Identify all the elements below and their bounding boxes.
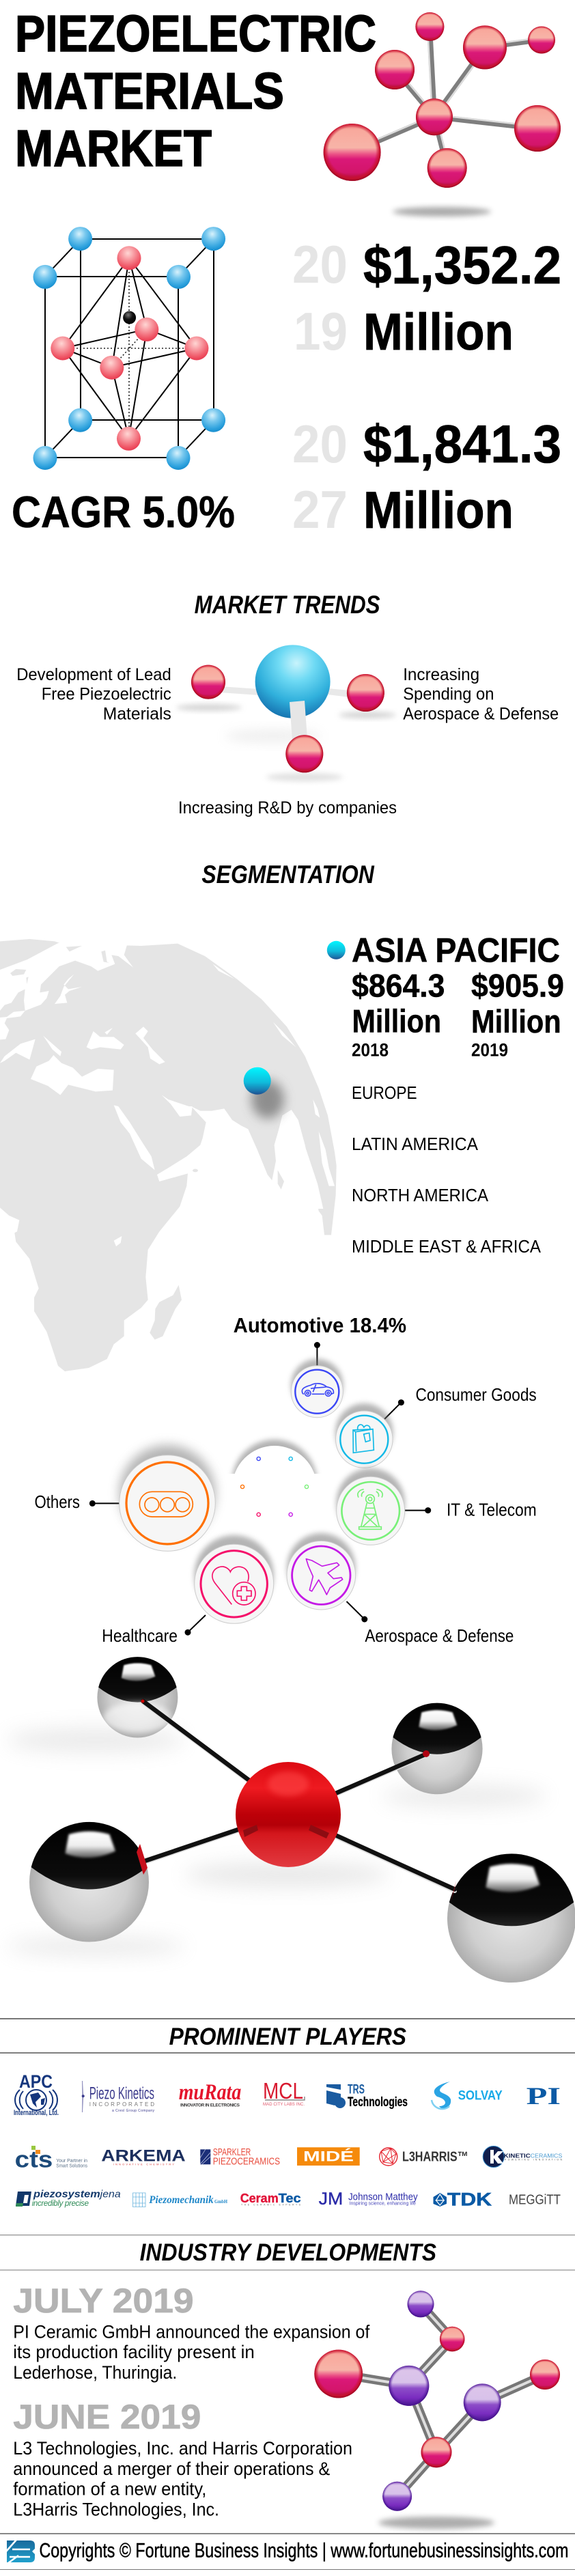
logo: TRS Technologies	[326, 2083, 408, 2110]
logo: Piezo Kinetics: Piezo Kinetics	[89, 2084, 154, 2103]
market value 2019: 19	[294, 301, 348, 361]
logo: CTS	[15, 2146, 87, 2172]
icon: IT and telecom	[337, 1468, 405, 1545]
development: june 2019: L3Harris Technologies, Inc.	[13, 2500, 219, 2520]
legend: asia pacific: $864.3	[352, 968, 445, 1004]
region list: LATIN AMERICA	[352, 1134, 479, 1154]
logo: Piezomechanik	[132, 2193, 228, 2207]
logo: PI: PI	[527, 2082, 561, 2110]
molecule illustration: chrome and red	[7, 1657, 575, 1983]
logo: Sparkler Piezoceramics: SPARKLER	[213, 2147, 251, 2158]
trend: aerospace and defense spending: Increasing	[403, 665, 479, 684]
trend: R and D: Increasing R&D by companies	[178, 798, 397, 817]
logo: Piezomechanik: GmbH	[214, 2199, 228, 2204]
logo: Johnson Matthey: Johnson Matthey	[348, 2192, 418, 2202]
region list: NORTH AMERICA	[352, 1185, 489, 1205]
development: july 2019: PI Ceramic GmbH announced the expansion of	[13, 2321, 370, 2342]
molecule illustration: header	[324, 12, 561, 216]
label: others	[34, 1492, 119, 1512]
logo: piezosystem jena: jena	[99, 2188, 121, 2200]
logo: CeramTec: Tec	[279, 2192, 301, 2205]
market value 2027	[292, 414, 561, 540]
logo: CeramTec: Ceram	[240, 2192, 279, 2205]
icon: aerospace and defense	[287, 1533, 356, 1610]
logo: piezosystem jena: piezosystem	[33, 2188, 100, 2200]
logo: Johnson Matthey: Inspiring science, enhancing life	[350, 2201, 416, 2206]
legend: asia pacific: $905.9	[471, 968, 564, 1004]
icon: healthcare	[195, 1535, 274, 1623]
logo: Sparkler Piezoceramics	[200, 2147, 280, 2167]
trend: aerospace and defense spending	[403, 665, 559, 723]
logo: APC International	[14, 2071, 59, 2117]
logo: Johnson Matthey: JM	[319, 2189, 343, 2209]
label: aerospace and defense: Aerospace & Defense	[365, 1625, 514, 1646]
icon: consumer goods	[335, 1403, 393, 1468]
logo: Sparkler Piezoceramics: PIEZOCERAMICS	[213, 2156, 280, 2167]
logo: CTS: Smart Solutions	[56, 2162, 87, 2168]
crystal lattice diagram	[33, 227, 225, 470]
development: june 2019: announced a merger of their operations &	[13, 2459, 330, 2479]
development: july 2019: Lederhose, Thuringia.	[13, 2362, 177, 2383]
market value 2027: 20	[292, 414, 348, 474]
legend: asia pacific: ASIA PACIFIC	[352, 932, 560, 970]
heading: industry developments: INDUSTRY DEVELOPMENTS	[140, 2239, 436, 2266]
logo: Kinetic Ceramics	[483, 2146, 563, 2168]
development: june 2019: L3 Technologies, Inc. and Harris Corporation	[13, 2438, 352, 2459]
CAGR figure: CAGR 5.0%	[12, 487, 235, 537]
region list: MIDDLE EAST & AFRICA	[352, 1236, 542, 1257]
title: MATERIALS	[15, 62, 284, 120]
logo: Solvay	[432, 2082, 503, 2109]
development: july 2019: JULY 2019	[13, 2282, 194, 2320]
footer	[0, 2534, 575, 2569]
logo: Mide	[297, 2147, 360, 2166]
region list	[352, 1082, 542, 1257]
trend: lead free materials	[16, 665, 171, 723]
label: consumer goods	[384, 1384, 537, 1419]
logo: MCL Mad City Labs: MAD CITY LABS INC.	[263, 2103, 305, 2107]
logo: L3Harris: L3HARRIS™	[402, 2149, 468, 2164]
label: others: Others	[34, 1492, 80, 1512]
logo: CTS: cts	[15, 2146, 53, 2172]
label: aerospace and defense	[347, 1601, 514, 1646]
molecule illustration: developments	[314, 2291, 560, 2529]
logo: APC International: International, Ltd.	[14, 2109, 59, 2117]
trend: aerospace and defense spending: Spending on	[403, 685, 494, 704]
logo: Johnson Matthey	[319, 2189, 418, 2209]
market value 2019	[292, 234, 561, 361]
title	[15, 5, 376, 177]
logo: Piezo Kinetics	[82, 2081, 154, 2113]
market value 2019: Million	[363, 303, 514, 361]
development: july 2019: its production facility present in	[13, 2342, 255, 2362]
logo: CeramTec: THE CERAMIC EXPERTS	[241, 2203, 301, 2206]
logo: Kinetic Ceramics: CERAMICS	[531, 2153, 563, 2159]
logo: Arkema: INNOVATIVE CHEMISTRY	[113, 2162, 174, 2166]
logo: Kinetic Ceramics: POWERING INNOVATION	[505, 2159, 562, 2161]
label: healthcare: Healthcare	[102, 1625, 178, 1646]
trend: lead free materials: Development of Lead	[16, 665, 171, 684]
center hub with dots	[222, 1440, 328, 1539]
map marker: asia pacific	[244, 1067, 284, 1119]
heading: segmentation: SEGMENTATION	[201, 860, 375, 888]
logo: CTS: Your Partner in	[56, 2157, 87, 2164]
market value 2027: Million	[363, 481, 514, 540]
logo: CeramTec	[240, 2192, 301, 2206]
logo: TDK	[433, 2189, 492, 2209]
logo: TDK: TDK	[447, 2189, 492, 2209]
market value 2027: 27	[292, 479, 348, 540]
trend: aerospace and defense spending: Aerospace & Defense	[403, 704, 559, 723]
logo: Mide: MIDÉ	[303, 2148, 354, 2164]
trend: lead free materials: Free Piezoelectric	[42, 685, 171, 704]
development: july 2019	[13, 2282, 370, 2383]
logo: Meggitt: MEGGiTT	[509, 2193, 561, 2208]
molecule illustration: trends	[176, 645, 396, 781]
logo: Kinetic Ceramics: KINETIC	[504, 2153, 531, 2159]
logo: TRS Technologies: TRS	[348, 2083, 365, 2097]
market value 2027: $1,841.3	[363, 414, 561, 474]
legend: asia pacific: Million	[471, 1003, 561, 1039]
label: automotive: Automotive 18.4%	[234, 1313, 406, 1337]
logo: Solvay: SOLVAY	[458, 2089, 503, 2103]
logo: piezosystem jena: incredibly precise	[32, 2200, 89, 2208]
logo: L3Harris	[380, 2148, 468, 2166]
heading: market trends: MARKET TRENDS	[195, 591, 380, 619]
development: june 2019: formation of a new entity,	[13, 2479, 206, 2500]
logo: Piezo Kinetics: a Cresl Group Company	[112, 2109, 154, 2113]
legend: asia pacific: 2019	[471, 1039, 508, 1060]
logo: TRS Technologies: Technologies	[348, 2095, 408, 2110]
trend: lead free materials: Materials	[103, 704, 171, 723]
world map	[0, 939, 337, 1371]
region list: EUROPE	[352, 1082, 417, 1103]
logo: Piezo Kinetics: INCORPORATED	[89, 2101, 154, 2108]
icon: others	[120, 1445, 215, 1551]
development: june 2019	[13, 2398, 352, 2520]
logo: Arkema: ARKEMA	[101, 2146, 186, 2165]
market value 2019: 20	[292, 234, 348, 294]
label: automotive	[234, 1313, 406, 1367]
logo: piezosystem jena	[16, 2188, 121, 2208]
logo: muRata: muRata	[179, 2080, 241, 2105]
logo: APC International: APC	[19, 2071, 53, 2092]
logo: Piezomechanik: Piezomechanik	[148, 2194, 214, 2206]
legend: asia pacific: Million	[352, 1003, 441, 1039]
label: IT and telecom	[404, 1499, 537, 1520]
heading: prominent players: PROMINENT PLAYERS	[169, 2024, 406, 2050]
legend: asia pacific: 2018	[352, 1039, 389, 1060]
market value 2019: $1,352.2	[363, 235, 561, 295]
title: PIEZOELECTRIC	[15, 5, 376, 62]
label: consumer goods: Consumer Goods	[415, 1384, 537, 1405]
logo: MCL Mad City Labs: MCL	[263, 2078, 303, 2103]
label: healthcare	[102, 1615, 206, 1646]
title: MARKET	[15, 120, 212, 177]
label: IT and telecom: IT & Telecom	[447, 1499, 537, 1520]
icon: automotive	[291, 1359, 343, 1418]
development: june 2019: JUNE 2019	[13, 2398, 201, 2436]
legend: asia pacific	[327, 932, 564, 1060]
logo: muRata: INNOVATOR IN ELECTRONICS	[180, 2103, 240, 2108]
